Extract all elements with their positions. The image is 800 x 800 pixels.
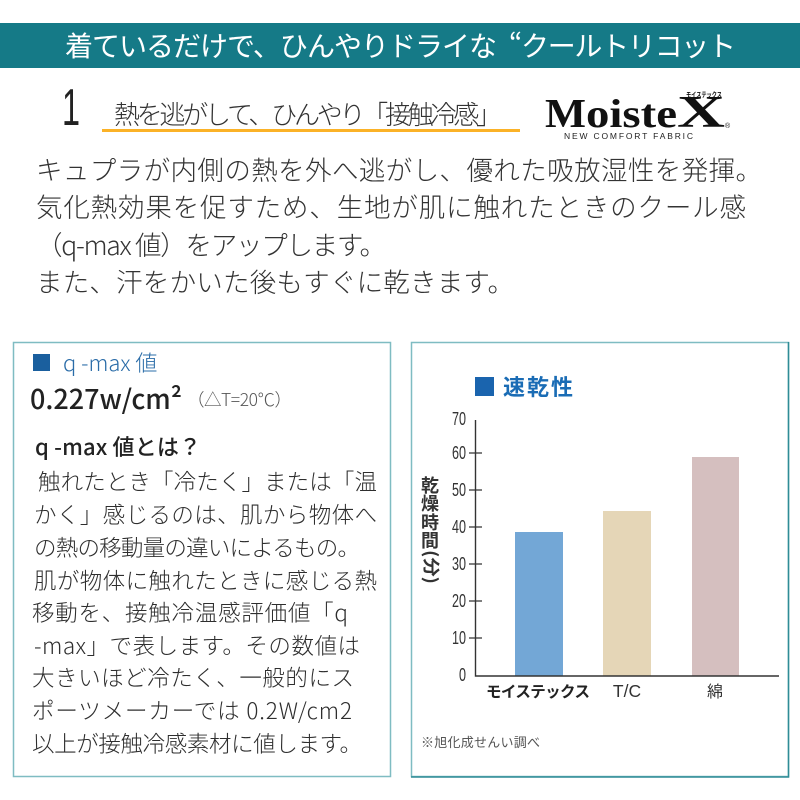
x-axis labels: モイステックス	[486, 680, 590, 702]
logo: MoisteX: X	[677, 87, 725, 137]
panel: quick drying	[411, 342, 788, 777]
q-max explanation text: の熱の移動量の違いによるもの。	[34, 531, 360, 563]
q-max explanation text: 肌が物体に触れたときに感じる熱	[34, 564, 377, 596]
y-axis labels: 50	[452, 480, 466, 500]
y-axis labels: 60	[452, 443, 466, 463]
q-max explanation text: 大きいほど冷たく、一般的にス	[32, 661, 354, 693]
y-axis labels: 70	[452, 409, 466, 429]
y-axis labels: 40	[452, 517, 466, 537]
logo: MoisteX: M	[545, 90, 586, 136]
q-max explanation heading: q -max 値とは？	[35, 430, 201, 462]
source note: ※旭化成せんい調べ	[421, 732, 540, 751]
logo: MoisteX: モイステックス	[686, 90, 722, 99]
title banner	[0, 23, 800, 68]
title banner: “クールトリコット	[509, 25, 736, 65]
q-max figure: 0.227w/cm²	[30, 378, 182, 417]
logo: MoisteX: NEW COMFORT FABRIC	[564, 131, 693, 141]
title banner: 着ているだけで、ひんやりドライな	[65, 25, 497, 65]
y-axis labels	[452, 409, 466, 685]
bar: T/C 44	[603, 511, 651, 676]
axes	[469, 420, 779, 676]
logo: MoisteX: ®	[725, 122, 731, 130]
y-axis title: 燥	[421, 490, 439, 516]
q-max explanation text	[32, 465, 377, 759]
quick drying heading: 速乾性	[503, 370, 573, 402]
intro text block: キュプラが内側の熱を外へ逃がし、優れた吸放湿性を発揮。	[36, 149, 762, 188]
y-axis labels: 0	[459, 665, 466, 685]
y-axis title: 時	[421, 509, 439, 535]
q-max heading: q -max 値	[63, 346, 157, 378]
logo: MoisteX: oiste	[586, 91, 677, 136]
q-max explanation text: 移動を、接触冷温感評価値「q	[32, 596, 348, 628]
bar: Moistex 38.5	[515, 532, 563, 676]
section heading: 熱を逃がして、ひんやり「接触冷感」	[114, 95, 502, 132]
q-max explanation text: 以上が接触冷感素材に値します。	[32, 727, 362, 759]
y-axis labels: 20	[452, 591, 466, 611]
intro text block: 気化熱効果を促すため、生地が肌に触れたときのクール感	[36, 186, 746, 225]
bar: cotton 59	[692, 457, 739, 676]
section number: 1	[62, 79, 80, 137]
y-axis title: 乾	[421, 472, 439, 498]
intro text block: （q-max 値）をアップします。	[36, 224, 386, 263]
q-max figure: （△T=20℃）	[187, 387, 292, 412]
x-axis labels: 綿	[707, 678, 723, 702]
y-axis title: (分)	[420, 550, 445, 584]
logo: MoisteX	[545, 87, 731, 141]
q-max explanation text: ポーツメーカーでは 0.2W/cm2	[32, 694, 352, 726]
y-axis labels: 30	[452, 554, 466, 574]
x-axis labels	[486, 678, 723, 702]
y-axis title: 間	[421, 527, 439, 553]
intro text block	[36, 149, 762, 300]
q-max figure	[30, 378, 292, 417]
q-max explanation text: 触れたとき「冷たく」または「温	[38, 465, 377, 497]
intro text block: また、汗をかいた後もすぐに乾きます。	[36, 261, 514, 300]
q-max explanation text: かく」感じるのは、肌から物体へ	[34, 498, 377, 530]
x-axis labels: T/C	[613, 681, 641, 701]
y-axis title	[420, 472, 445, 584]
bar chart	[420, 409, 779, 702]
q-max explanation text: -max」で表します。その数値は	[34, 629, 360, 661]
panel: q-max value	[14, 342, 390, 776]
y-axis labels: 10	[452, 628, 466, 648]
